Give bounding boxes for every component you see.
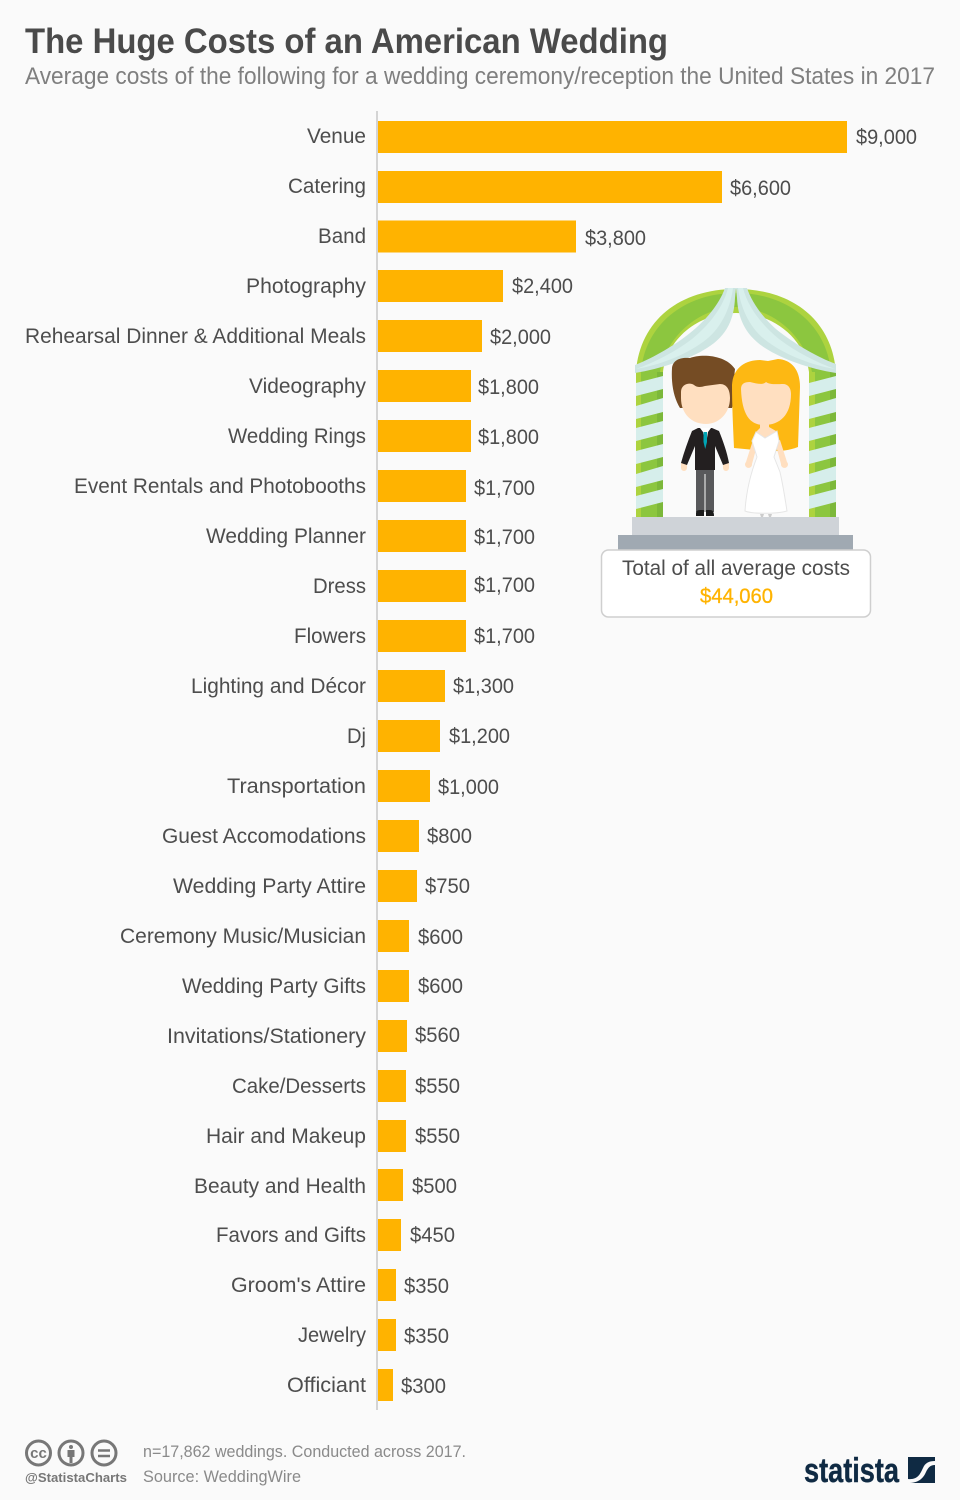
subtitle: Average costs of the following for a wedding ceremony/reception the United States in 2017 — [25, 63, 935, 90]
row: Wedding Planner — [206, 520, 535, 552]
row: Groom's Attire: Groom's Attire — [231, 1273, 366, 1297]
row: Flowers: $1,700 — [474, 624, 535, 648]
row: Venue: Venue — [307, 124, 366, 148]
row: Ceremony Music/Musician: Ceremony Music/Musician — [120, 924, 366, 948]
row: Wedding Party Gifts — [182, 970, 463, 1002]
icon: no derivatives — [92, 1441, 116, 1465]
row: Favors and Gifts: Favors and Gifts — [216, 1223, 366, 1247]
row: Cake/Desserts: $550 — [415, 1074, 460, 1098]
row: Invitations/Stationery: $560 — [415, 1023, 460, 1047]
row: Dress: Dress — [313, 574, 366, 598]
row: Favors and Gifts: $450 — [410, 1223, 455, 1247]
row: Groom's Attire: $350 — [404, 1274, 449, 1298]
bride arms — [745, 440, 788, 468]
handle: @StatistaCharts — [25, 1470, 127, 1485]
icon: attribution — [59, 1441, 83, 1465]
row: Catering — [288, 171, 791, 203]
row: Beauty and Health — [194, 1169, 457, 1201]
groom shirt and tie — [700, 428, 711, 447]
row: Guest Accomodations: Guest Accomodations — [162, 824, 366, 848]
row: Transportation: $1,000 — [438, 775, 499, 799]
logo mark — [908, 1457, 935, 1483]
row: Jewelry — [298, 1319, 449, 1351]
row: Hair and Makeup: Hair and Makeup — [206, 1124, 366, 1148]
row: Lighting and Decor — [191, 670, 514, 702]
row: Band: Band — [318, 224, 366, 248]
row: Ceremony Music/Musician — [120, 920, 463, 952]
row: Catering: $6,600 — [730, 176, 791, 200]
row: Photography — [246, 270, 573, 302]
chart axis — [376, 111, 378, 1410]
row: Transportation — [227, 770, 499, 802]
row: Guest Accomodations: $800 — [427, 824, 472, 848]
row: Dj: $1,200 — [449, 724, 510, 748]
row: Wedding Party Gifts: Wedding Party Gifts — [182, 974, 366, 998]
row: Lighting and Decor: Lighting and Décor — [191, 674, 366, 698]
row: Dress: $1,700 — [474, 573, 535, 597]
note: n=17,862 weddings. Conducted across 2017. — [143, 1443, 466, 1461]
groom shoes — [696, 510, 714, 516]
row: Videography: Videography — [249, 374, 366, 398]
row: Venue: $9,000 — [856, 125, 917, 149]
row: Lighting and Decor: $1,300 — [453, 674, 514, 698]
row: Rehearsal Dinner and Additional Meals: $2,000 — [490, 325, 551, 349]
bride neck and chest — [756, 420, 776, 440]
row: Favors and Gifts — [216, 1219, 455, 1251]
row: Cake/Desserts: Cake/Desserts — [232, 1074, 366, 1098]
groom tie — [704, 432, 707, 449]
groom head — [672, 356, 735, 408]
row: Wedding Rings — [228, 420, 539, 452]
row: Videography: $1,800 — [478, 375, 539, 399]
icon: cc: cc — [30, 1445, 47, 1462]
row: Wedding Planner: $1,700 — [474, 525, 535, 549]
bride dress — [745, 431, 787, 513]
row: Jewelry: Jewelry — [298, 1323, 366, 1347]
row: Flowers — [294, 620, 535, 652]
row: Groom's Attire — [231, 1269, 449, 1301]
row: Dj — [347, 720, 510, 752]
row: Photography: Photography — [246, 274, 366, 298]
callout value: $44,060 — [700, 585, 773, 608]
callout: total costs — [602, 550, 870, 617]
row: Rehearsal Dinner and Additional Meals — [25, 320, 551, 352]
groom hands — [681, 463, 729, 471]
curtains — [635, 288, 836, 373]
row: Event Rentals and Photobooths: Event Rentals and Photobooths — [74, 474, 366, 498]
upper platform step — [632, 517, 839, 535]
row: Officiant: $300 — [401, 1374, 446, 1398]
lower platform step — [618, 535, 853, 550]
groom jacket — [681, 428, 729, 470]
row: Invitations/Stationery: Invitations/Stationery — [167, 1024, 366, 1048]
row: Wedding Rings: $1,800 — [478, 425, 539, 449]
icons: creative commons — [26, 1441, 116, 1465]
source: Source: WeddingWire — [143, 1468, 301, 1486]
row: Wedding Party Attire — [173, 870, 470, 902]
groom face — [681, 384, 730, 424]
row: Beauty and Health: $500 — [412, 1174, 457, 1198]
row: Dress — [313, 570, 535, 602]
row: Ceremony Music/Musician: $600 — [418, 925, 463, 949]
row: Flowers: Flowers — [294, 624, 366, 648]
row: Catering: Catering — [288, 174, 366, 198]
row: Hair and Makeup: $550 — [415, 1124, 460, 1148]
row: Hair and Makeup — [206, 1120, 460, 1152]
groom — [672, 356, 735, 516]
row: Cake/Desserts — [232, 1070, 460, 1102]
column ribbons — [636, 376, 836, 509]
row: Transportation: Transportation — [227, 774, 366, 798]
row: Beauty and Health: Beauty and Health — [194, 1174, 366, 1198]
bride face — [741, 382, 791, 425]
row: Officiant: Officiant — [287, 1373, 366, 1397]
callout label: Total of all average costs — [622, 556, 850, 580]
row: Invitations/Stationery — [167, 1020, 460, 1052]
bride feet — [760, 514, 772, 517]
row: Wedding Party Attire: $750 — [425, 874, 470, 898]
bride hair — [732, 359, 800, 451]
illustration: wedding couple under arch — [618, 288, 853, 550]
row: Rehearsal Dinner and Additional Meals: Rehearsal Dinner & Additional Meals — [25, 324, 366, 348]
statista logo: statista — [804, 1452, 900, 1490]
bar chart — [25, 121, 917, 1401]
row: Wedding Rings: Wedding Rings — [228, 424, 366, 448]
row: Venue — [307, 121, 917, 153]
row: Videography — [249, 370, 539, 402]
row: Wedding Party Gifts: $600 — [418, 974, 463, 998]
row: Officiant — [287, 1369, 446, 1401]
row: Band — [318, 220, 646, 252]
row: Wedding Planner: Wedding Planner — [206, 524, 366, 548]
title: The Huge Costs of an American Wedding — [25, 22, 668, 61]
row: Event Rentals and Photobooths: $1,700 — [474, 476, 535, 500]
row: Photography: $2,400 — [512, 274, 573, 298]
groom legs — [696, 470, 714, 512]
row: Wedding Party Attire: Wedding Party Attire — [173, 874, 366, 898]
row: Event Rentals and Photobooths — [74, 470, 535, 502]
row: Guest Accomodations — [162, 820, 472, 852]
row: Jewelry: $350 — [404, 1324, 449, 1348]
arch — [636, 289, 836, 517]
bride — [732, 359, 800, 517]
row: Band: $3,800 — [585, 226, 646, 250]
row: Dj: Dj — [347, 724, 366, 748]
